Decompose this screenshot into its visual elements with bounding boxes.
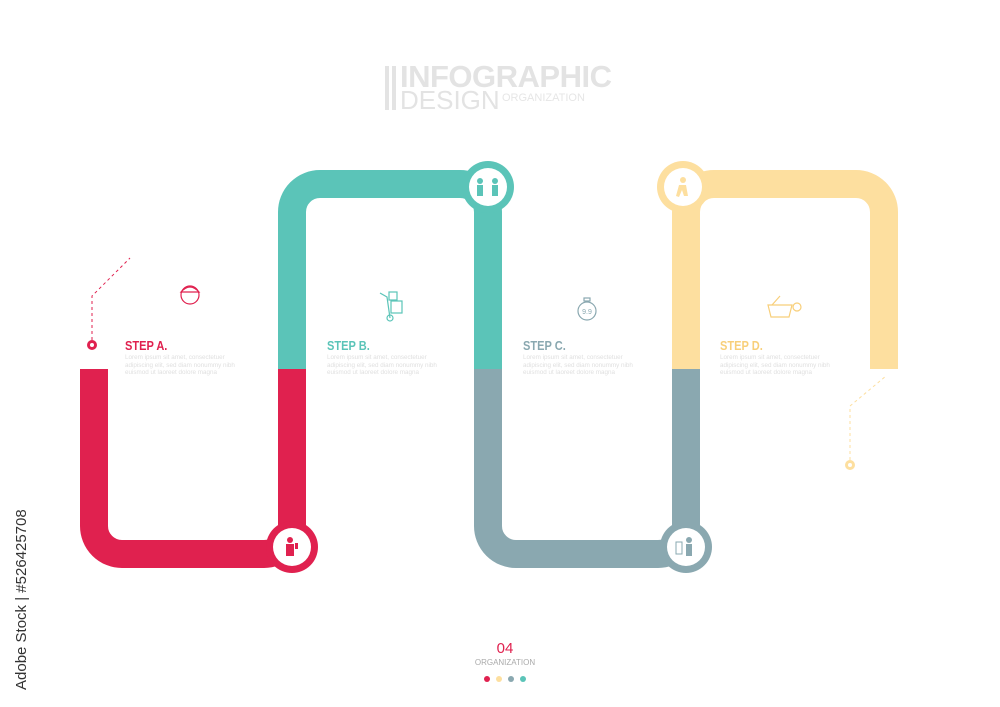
step D: Lorem ipsum sit amet, consectetuer adipiscing elit, sed diam nonummy nibh euismod ut laoreet dolore magna bbox=[720, 354, 830, 376]
connector: left bbox=[87, 258, 130, 350]
step A: STEP A. bbox=[125, 338, 167, 353]
icon: face bbox=[181, 286, 199, 304]
connector: right bbox=[845, 376, 886, 470]
footer: 04 bbox=[497, 640, 513, 657]
step B: STEP B. bbox=[327, 338, 370, 353]
watermark id: Adobe Stock | #526425708 bbox=[13, 509, 30, 690]
footer bbox=[475, 640, 535, 682]
title: ORGANIZATION bbox=[502, 92, 585, 104]
step B bbox=[327, 338, 437, 376]
title: INFOGRAPHIC bbox=[400, 59, 612, 94]
step D bbox=[720, 338, 830, 376]
icon: red node bbox=[266, 521, 318, 573]
step A: Lorem ipsum sit amet, consectetuer adipiscing elit, sed diam nonummy nibh euismod ut laoreet dolore magna bbox=[125, 354, 235, 376]
title: DESIGN bbox=[400, 85, 500, 115]
yellow segment bbox=[686, 184, 884, 369]
step A bbox=[125, 338, 235, 376]
red segment bbox=[94, 369, 292, 554]
icon: trolley bbox=[380, 292, 402, 321]
icon: gray node bbox=[660, 521, 712, 573]
step C bbox=[523, 338, 633, 376]
teal segment bbox=[292, 184, 488, 369]
title bbox=[385, 59, 612, 115]
footer: ORGANIZATION bbox=[475, 658, 535, 667]
step D: STEP D. bbox=[720, 338, 763, 353]
step C: STEP C. bbox=[523, 338, 566, 353]
icon: basket bbox=[768, 296, 801, 317]
step B: Lorem ipsum sit amet, consectetuer adipiscing elit, sed diam nonummy nibh euismod ut laoreet dolore magna bbox=[327, 354, 437, 376]
icon: stopwatch: 9.9 bbox=[582, 309, 592, 316]
icon: stopwatch bbox=[578, 298, 596, 320]
step C: Lorem ipsum sit amet, consectetuer adipiscing elit, sed diam nonummy nibh euismod ut laoreet dolore magna bbox=[523, 354, 633, 376]
icon: yellow node bbox=[657, 161, 709, 213]
gray segment bbox=[488, 369, 686, 554]
icon: teal node bbox=[462, 161, 514, 213]
